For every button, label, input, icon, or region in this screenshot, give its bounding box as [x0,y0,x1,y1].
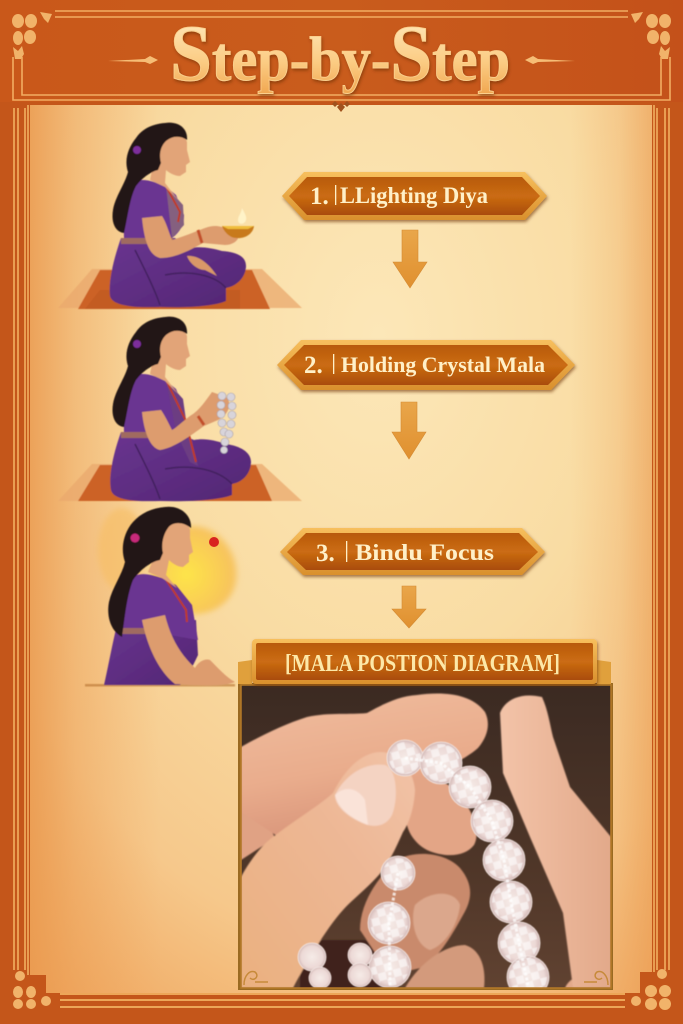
second finger [242,812,275,860]
diya [222,226,254,238]
neck and face [150,133,190,200]
thumbnail [335,765,396,826]
title: Step-by-Step [170,10,510,98]
woman 3 bindu focus [85,507,239,686]
hair [112,317,187,427]
bottom left corner ornament [13,971,51,1009]
diagram title banner [252,639,597,684]
arrow 3 [392,586,426,628]
hair flower [133,340,141,348]
lower finger [360,854,470,975]
woman 2 holding mala [58,317,302,501]
saree [104,620,198,685]
step 2 banner [277,340,575,390]
diagram title banner: [MALA POSTION DIAGRAM] [285,651,560,677]
title flourish right [525,56,575,64]
step 1 banner [282,172,547,220]
pallu border [165,578,187,622]
arm [142,392,229,450]
arm [142,615,235,685]
step 2 banner: 2. [304,352,323,379]
bottom right corner ornament [631,969,671,1010]
photo corner flourish right [584,972,608,985]
crystal beads [298,740,549,998]
arrow 2 [392,402,426,459]
title flourish left [108,56,158,64]
right finger [500,695,611,988]
prayer mat [58,464,302,501]
header band [0,0,683,102]
woman 1 lighting diya [58,123,302,309]
ground shadow [85,684,235,686]
yellow glow [151,526,239,614]
hair [108,507,191,637]
blouse [124,374,184,432]
upper arm and forearm [142,216,238,258]
header corner ornament right [631,12,671,59]
step 3 banner: 3. [316,540,335,567]
parchment panel [30,105,652,993]
red bindu dot [209,537,219,547]
middle finger [406,778,477,855]
pallu [166,380,198,466]
prayer mat [58,269,302,308]
mala position diagram frame [238,639,613,998]
arrow 1 [393,230,427,288]
photo corner flourish left [244,972,268,985]
frame gold ribbons [238,660,611,684]
blouse [124,180,184,238]
crystal mala strand [217,392,236,454]
step 2 banner: Holding Crystal Mala [341,352,545,377]
thumb [241,752,415,988]
neck and face [150,327,190,394]
index finger [241,694,488,838]
pallu [166,186,184,238]
bottom finger [405,945,484,988]
header corner ornament left [12,12,52,59]
lower hand [187,256,217,276]
hair [112,123,187,233]
photo of fingers holding crystal mala [241,685,611,998]
step 3 banner: Bindu Focus [355,540,494,565]
small ornament below header [332,101,350,112]
step 1 banner: 1. [310,183,329,210]
blouse [122,574,198,640]
saree [110,432,251,501]
step 1 banner: LLighting Diya [340,183,488,208]
saree [110,238,246,307]
step 3 banner [280,528,545,575]
hair flower [133,146,141,154]
hair flower [130,534,140,542]
flame [238,208,246,224]
neck and face [148,518,193,588]
